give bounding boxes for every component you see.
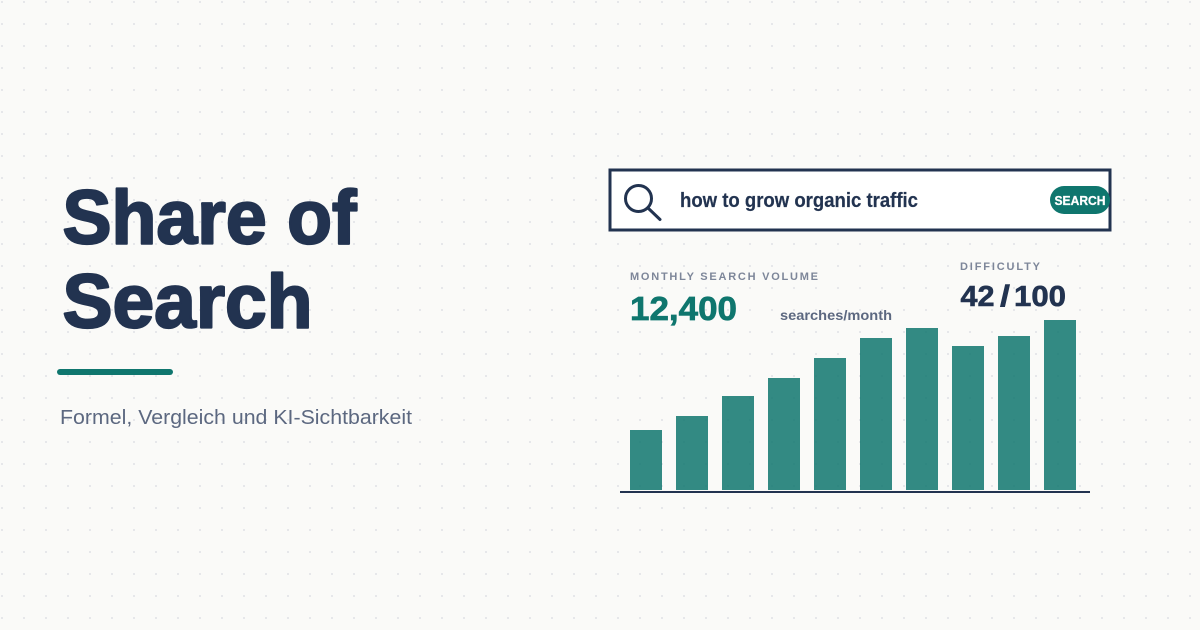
search button — [1050, 186, 1110, 214]
metric: monthly search volume: searches/month — [780, 307, 892, 323]
title: Share of — [62, 176, 357, 260]
metric: difficulty: 100 — [1014, 281, 1066, 313]
search query: how to grow organic traffic — [680, 190, 918, 212]
title — [62, 176, 357, 344]
icon: magnifying glass — [626, 186, 660, 220]
search button: SEARCH — [1054, 193, 1106, 208]
metric: monthly search volume: MONTHLY SEARCH VOLUME — [630, 271, 818, 283]
metric: difficulty: DIFFICULTY — [960, 261, 1041, 273]
search bar — [610, 170, 1110, 230]
title: Search — [62, 260, 312, 344]
metric: difficulty — [960, 261, 1066, 313]
accent rule — [57, 369, 173, 375]
subtitle: Formel, Vergleich und KI-Sichtbarkeit — [60, 407, 412, 429]
bar chart — [620, 320, 1090, 493]
metric: difficulty: / — [1000, 280, 1011, 313]
metric: monthly search volume — [630, 271, 892, 327]
metric: difficulty: 42 — [960, 281, 994, 313]
metric: monthly search volume: 12,400 — [630, 290, 737, 327]
